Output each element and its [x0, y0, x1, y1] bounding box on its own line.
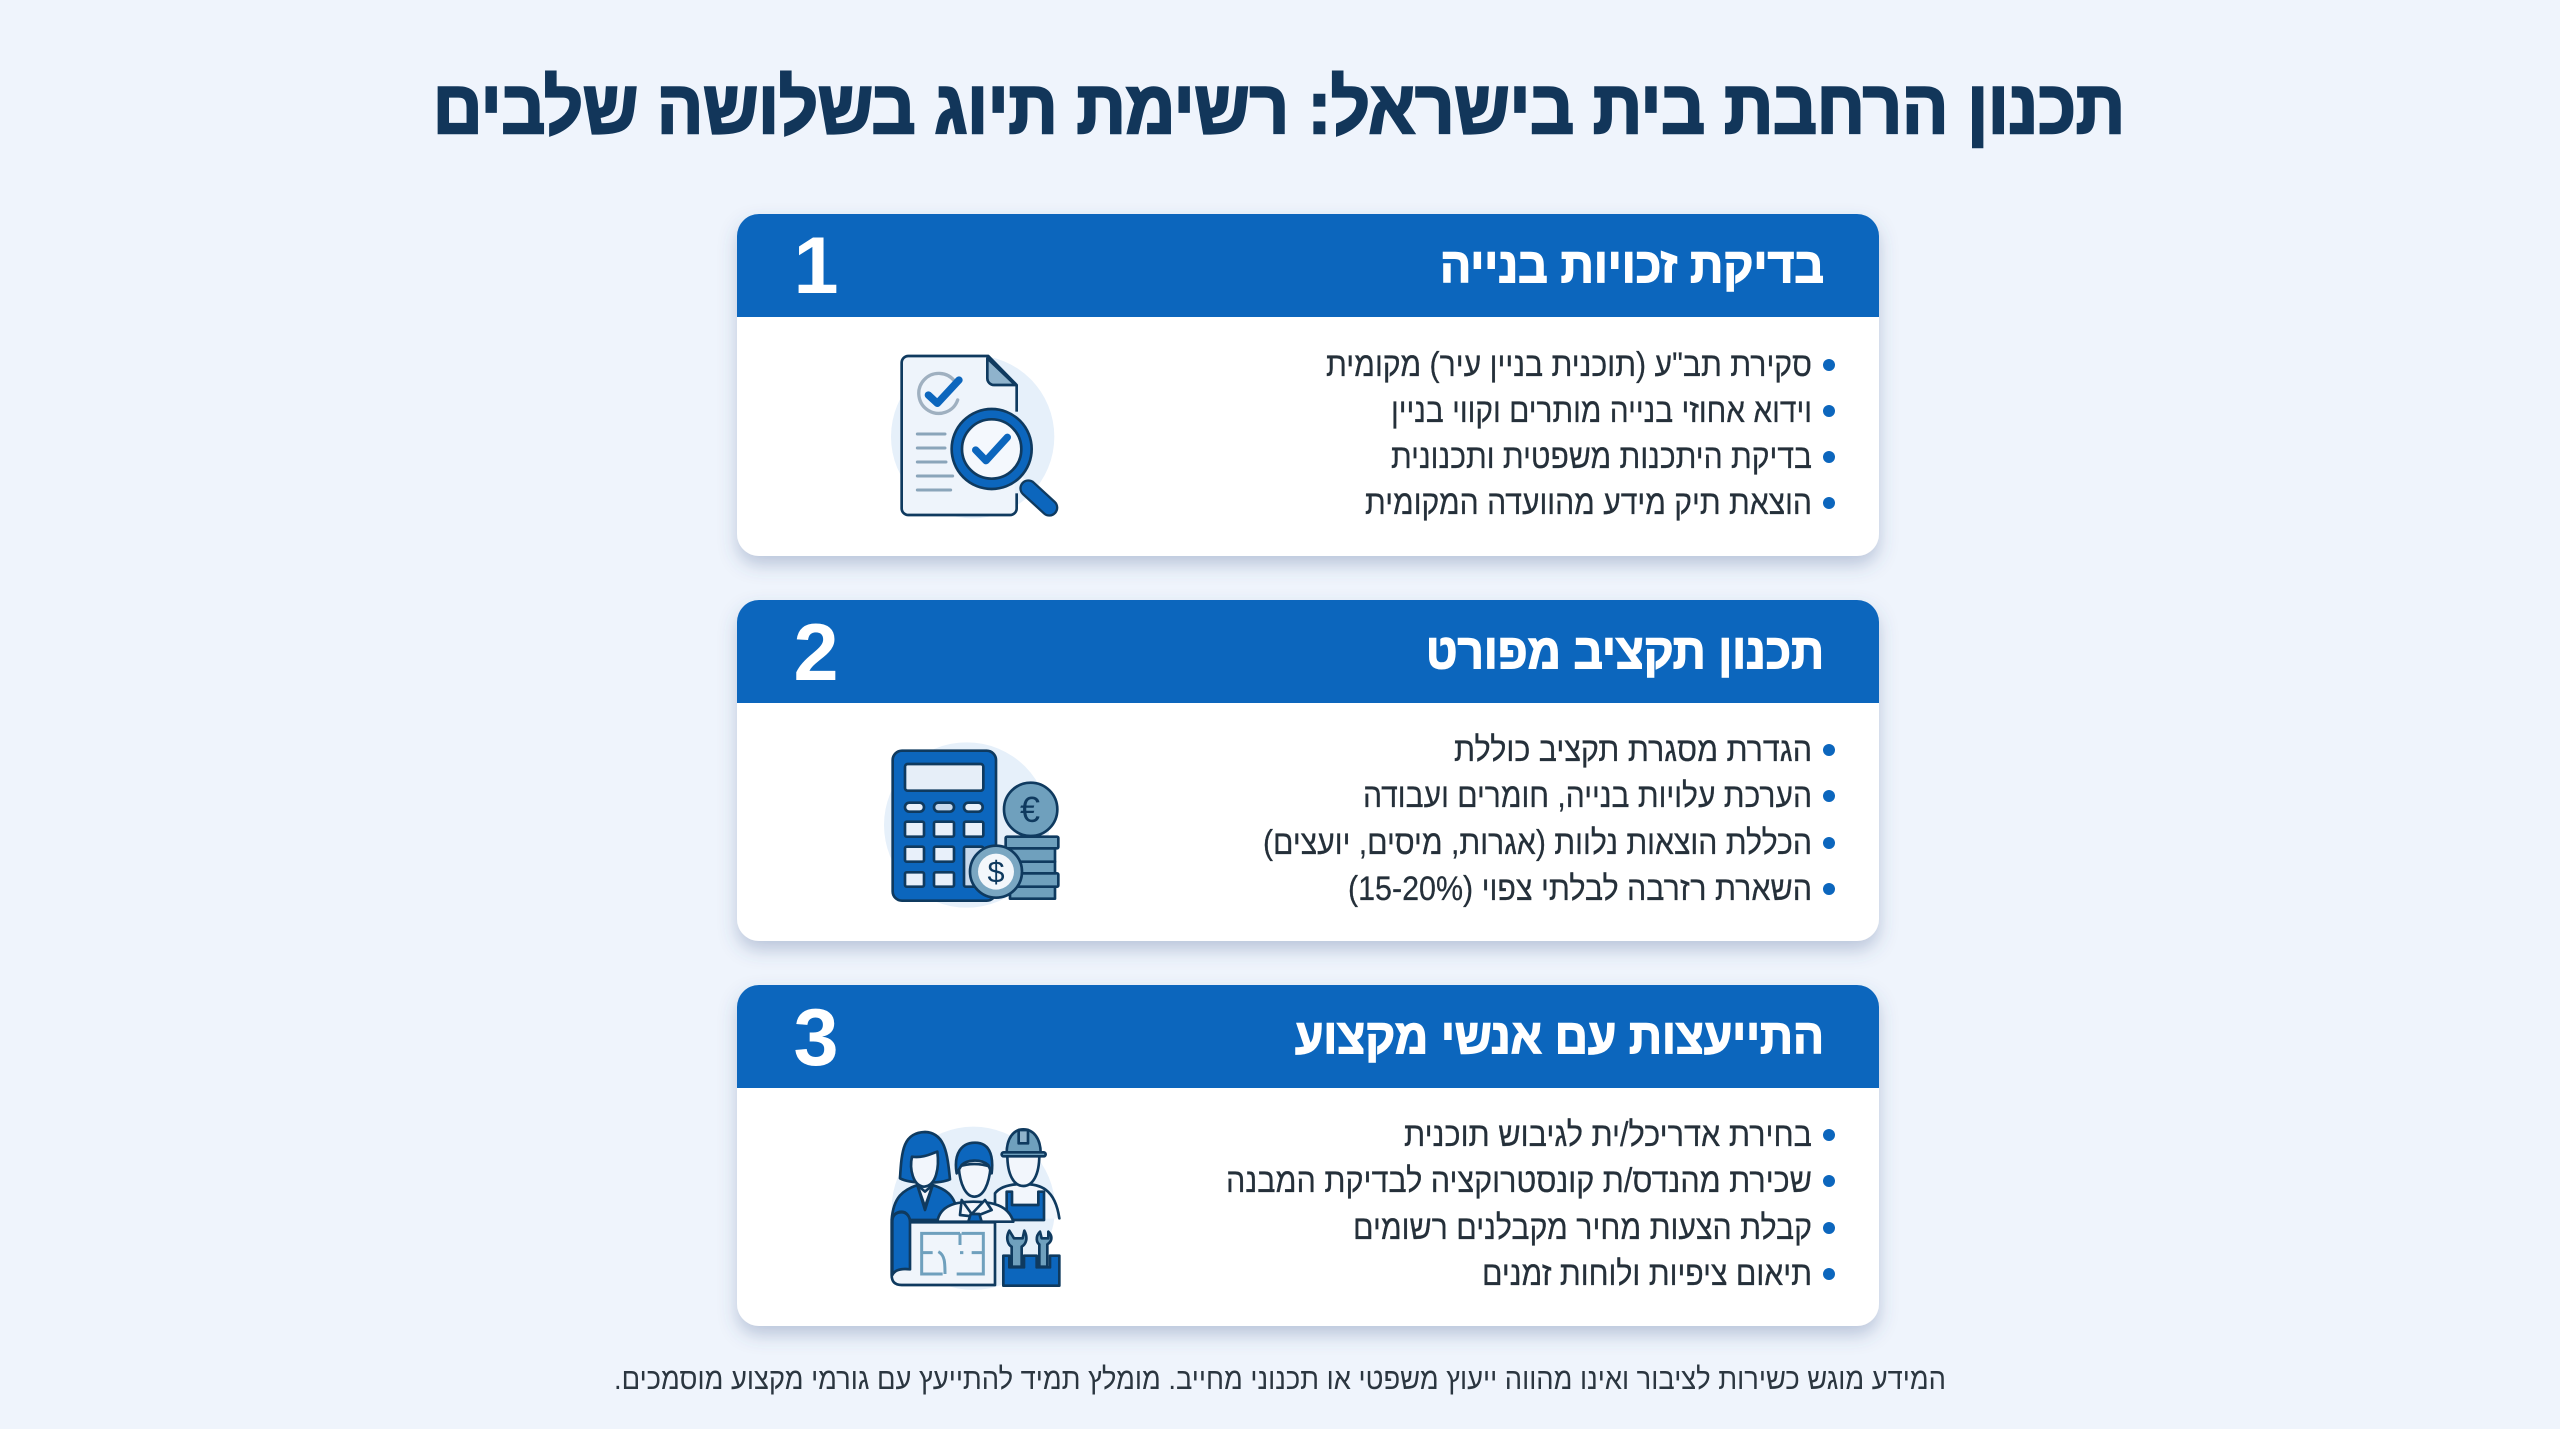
dollar sign: $	[987, 856, 1005, 890]
step number 3: 3	[793, 993, 839, 1083]
checklist step 1: בדיקת היתכנות משפטית ותכנונית	[1391, 438, 1812, 476]
step 3 heading: התייעצות עם אנשי מקצוע	[1295, 1010, 1824, 1064]
panel: step 3 professionals	[737, 985, 1879, 1326]
step number 1: 1	[793, 221, 839, 311]
checklist step 2	[1263, 731, 1835, 908]
checklist step 3	[1226, 1116, 1835, 1293]
checklist step 1: הוצאת תיק מידע מהוועדה המקומית	[1365, 484, 1812, 522]
title: תכנון הרחבת בית בישראל: רשימת תיוג בשלושה שלבים	[433, 65, 2125, 149]
checklist step 3: בחירת אדריכל/ית לגיבוש תוכנית	[1404, 1116, 1812, 1154]
checklist step 1: וידוא אחוזי בנייה מותרים וקווי בניין	[1391, 392, 1812, 430]
checklist step 1	[1326, 346, 1835, 522]
header band step 3	[737, 985, 1879, 1088]
checklist step 2: הגדרת מסגרת תקציב כוללת	[1454, 731, 1812, 769]
checklist step 3: שכירת מהנדס/ת קונסטרוקציה לבדיקת המבנה	[1226, 1162, 1812, 1200]
checklist step 1: סקירת תב"ע (תוכנית בניין עיר) מקומית	[1326, 346, 1812, 384]
icon: team of professionals with plan and tools	[892, 1127, 1059, 1290]
footnote disclaimer: המידע מוגש כשירות לציבור ואינו מהווה ייעוץ משפטי או תכנוני מחייב. מומלץ תמיד להתייעץ עם גורמי מקצוע מוסמכים.	[614, 1363, 1946, 1396]
step 1 heading: בדיקת זכויות בנייה	[1440, 239, 1824, 293]
euro sign: €	[1020, 789, 1040, 830]
header band step 1	[737, 214, 1879, 317]
step number 2: 2	[793, 608, 839, 698]
panel: step 2 budget	[737, 600, 1879, 941]
panel: step 1 building rights	[737, 214, 1879, 556]
icon: document with magnifying glass	[891, 355, 1054, 518]
checklist step 3: תיאום ציפיות ולוחות זמנים	[1482, 1255, 1812, 1293]
checklist step 2: הערכת עלויות בנייה, חומרים ועבודה	[1363, 777, 1812, 815]
step 2 heading: תכנון תקציב מפורט	[1426, 625, 1824, 679]
icon: calculator and coins	[884, 742, 1058, 908]
checklist step 3: קבלת הצעות מחיר מקבלנים רשומים	[1353, 1209, 1812, 1247]
checklist step 2: הכללת הוצאות נלוות (אגרות, מיסים, יועצים)	[1263, 824, 1812, 862]
checklist step 2: השארת רזרבה לבלתי צפוי (15-20%)	[1348, 870, 1812, 908]
header band step 2	[737, 600, 1879, 703]
